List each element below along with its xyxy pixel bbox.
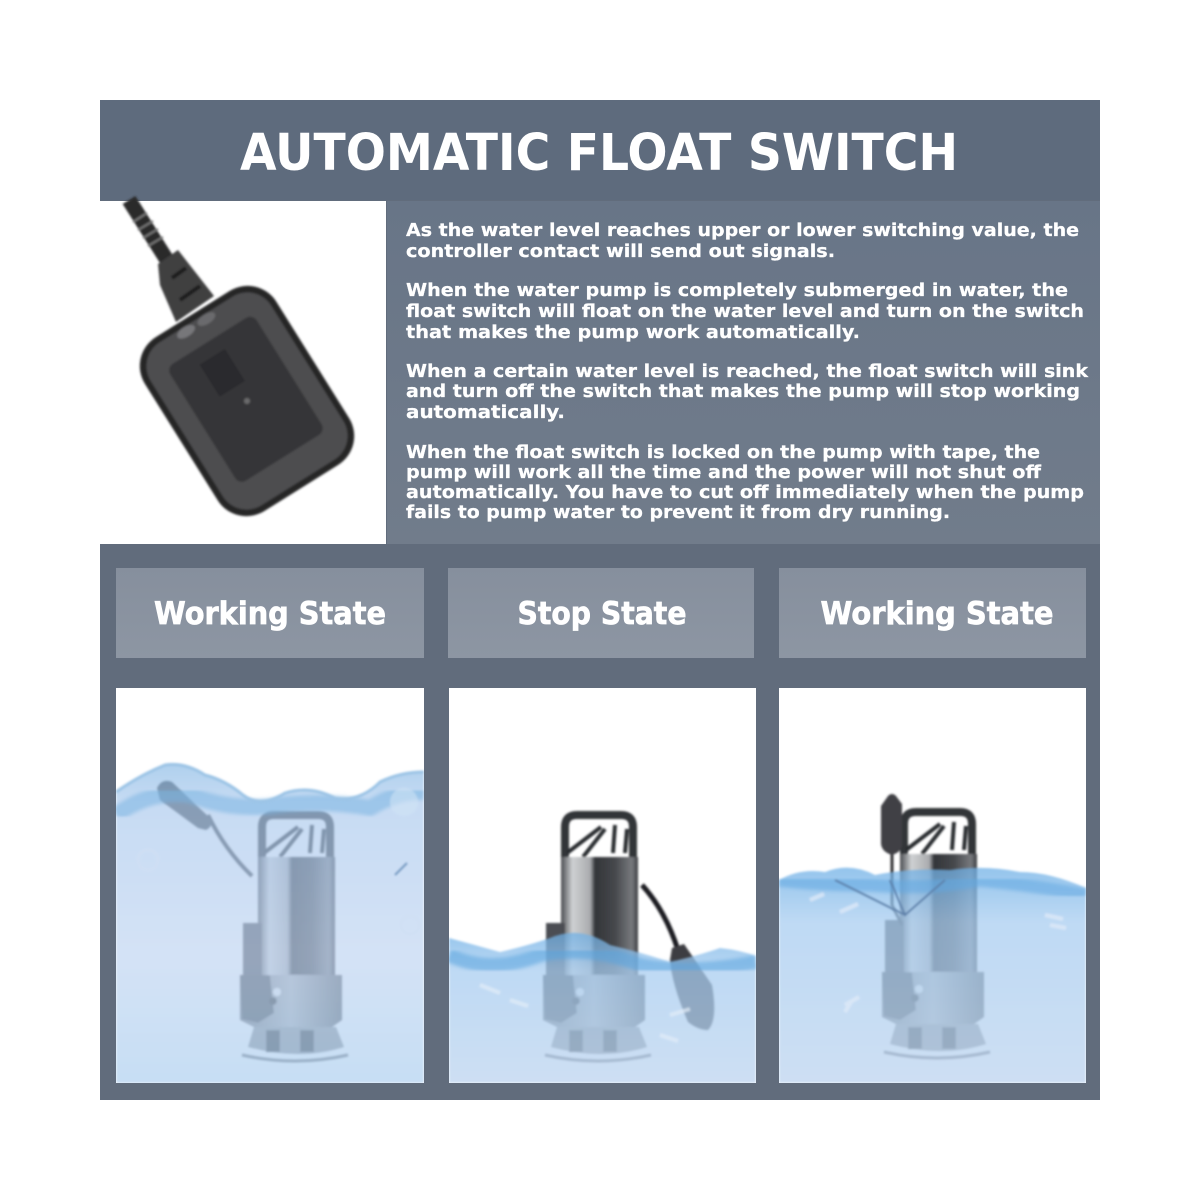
text block: tape warning: pump will work all the time and the power will not shut off: [406, 463, 1042, 483]
panel: working state photo 1: [116, 688, 424, 1083]
text block: signals: [406, 221, 1079, 262]
text block: submerged: [406, 281, 1084, 343]
heading: working state 2: [779, 568, 1086, 658]
text block: submerged: When the water pump is completely submerged in water, the: [406, 281, 1068, 301]
text block: submerged: that makes the pump work automatically.: [406, 323, 860, 343]
heading: working state 2: Working State: [820, 596, 1054, 632]
heading: stop state: [448, 568, 754, 658]
icon: pump submerged: [240, 815, 348, 1061]
heading: stop state: Stop State: [518, 596, 686, 632]
text block: submerged: float switch will float on the water level and turn on the switch: [406, 302, 1084, 322]
water: [779, 868, 1086, 1083]
heading: working state 1: [116, 568, 424, 658]
panel: description text: [387, 201, 1100, 544]
text block: sink: automatically.: [406, 403, 565, 423]
panel: working state photo 2: [779, 688, 1086, 1083]
text block: sink: and turn off the switch that makes the pump will stop working: [406, 382, 1080, 402]
water: [116, 764, 424, 1083]
panel: stop state photo: [449, 688, 756, 1083]
text block: signals: controller contact will send out signals.: [406, 242, 835, 262]
icon: upright float switch: [881, 794, 902, 925]
icon: float switch: [127, 200, 367, 529]
title: AUTOMATIC FLOAT SWITCH: [240, 124, 958, 183]
icon: pump partly exposed: [543, 815, 651, 1061]
water: [449, 933, 756, 1083]
text block: tape warning: [406, 443, 1084, 523]
infographic background: [100, 100, 1100, 1100]
text block: signals: As the water level reaches upper or lower switching value, the: [406, 221, 1079, 241]
text block: sink: When a certain water level is reached, the float switch will sink: [406, 362, 1088, 382]
heading: working state 1: Working State: [154, 596, 386, 632]
icon: hanging float switch: [642, 885, 714, 1030]
text block: tape warning: automatically. You have to cut off immediately when the pump: [406, 483, 1084, 503]
panel: float switch photo: [100, 200, 386, 544]
icon: floating switch: [157, 781, 252, 876]
text block: tape warning: When the float switch is locked on the pump with tape, the: [406, 443, 1040, 463]
title band: [100, 100, 1100, 200]
text block: tape warning: fails to pump water to prevent it from dry running.: [406, 503, 950, 523]
text block: sink: [406, 362, 1088, 423]
icon: pump mostly submerged: [882, 812, 990, 1058]
